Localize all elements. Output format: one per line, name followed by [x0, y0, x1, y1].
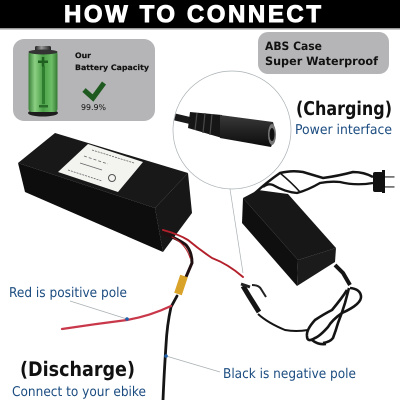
blue marker dots [125, 317, 168, 358]
panel: ABS case callout: Super Waterproof [265, 54, 379, 68]
panel: battery capacity [13, 39, 155, 121]
callout lines [70, 189, 243, 372]
label: discharge: Connect to your ebike [12, 384, 146, 400]
title banner [0, 0, 400, 30]
label: charging: Power interface [295, 122, 392, 138]
charger [241, 170, 394, 344]
panel: ABS case callout: ABS Case [265, 39, 322, 53]
label: discharge [12, 357, 146, 400]
charger body [242, 190, 336, 286]
charger output cord [258, 265, 361, 344]
capacity heading: Our [75, 51, 91, 60]
magnified circle: charging port [173, 71, 291, 189]
battery pack [18, 133, 192, 252]
label: red positive pole: Red is positive pole [9, 285, 127, 301]
capacity value: 99.9% [81, 103, 106, 112]
label: black negative pole: Black is negative pole [223, 366, 356, 382]
yellow connector [178, 276, 184, 294]
battery label [58, 144, 143, 192]
discharge wires [62, 230, 243, 400]
capacity heading: Battery Capacity [75, 63, 149, 72]
label: charging [295, 98, 392, 138]
panel: ABS case callout [258, 32, 389, 74]
icon: green battery [28, 46, 58, 116]
DC barrel connector [175, 112, 276, 147]
AC cord and plug [255, 170, 394, 193]
title banner: HOW TO CONNECT [64, 1, 321, 28]
label: discharge: (Discharge) [20, 357, 135, 381]
icon: check mark [84, 83, 104, 98]
output plug [241, 284, 266, 312]
